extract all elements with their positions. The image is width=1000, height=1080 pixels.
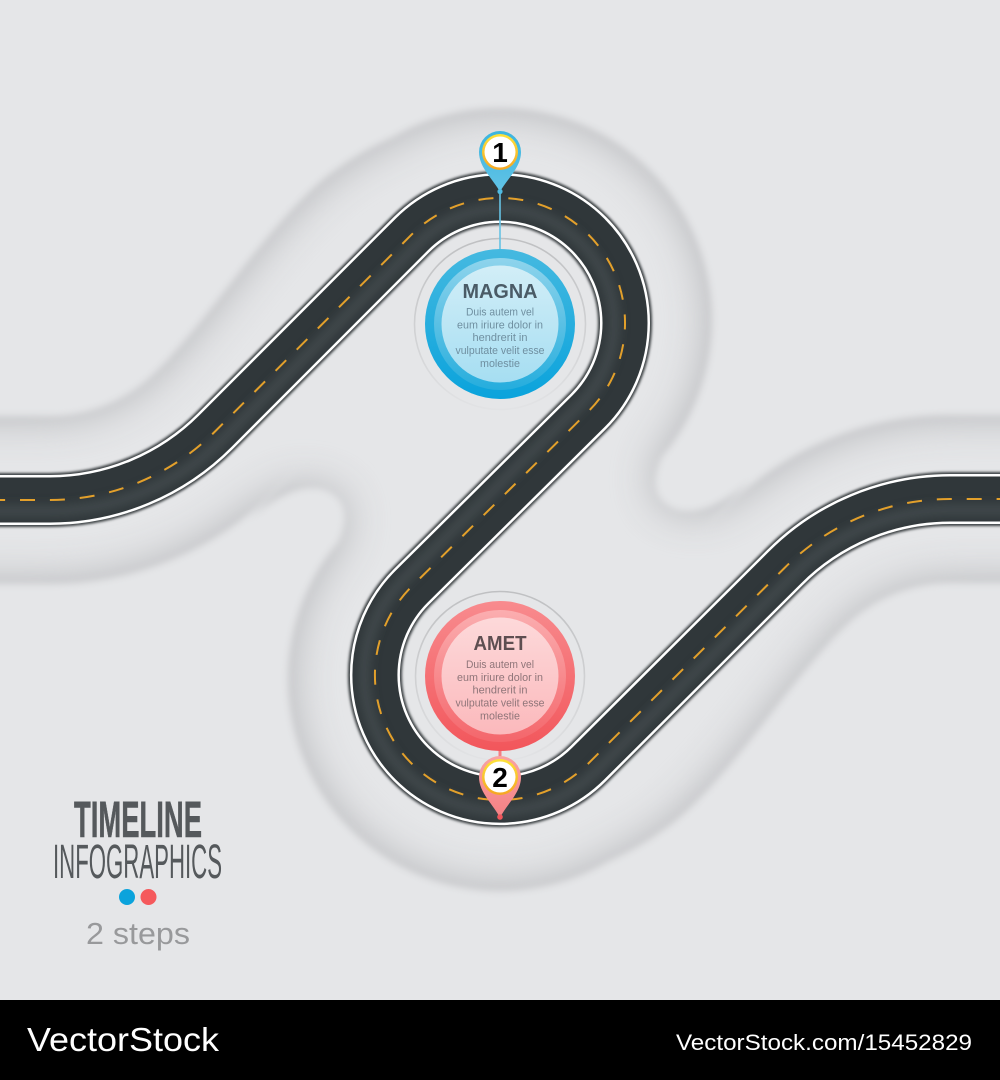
body text: vulputate velit esse xyxy=(456,698,544,710)
body text: molestie xyxy=(480,710,520,722)
panel: step 1 MAGNA xyxy=(414,190,586,410)
body text: vulputate velit esse xyxy=(456,345,544,357)
icon: map pin 1: 1 xyxy=(492,137,508,168)
step count: 2 steps xyxy=(86,916,190,951)
connector line xyxy=(498,748,502,760)
winding road xyxy=(0,198,1000,811)
footer bar xyxy=(0,1000,1000,1080)
icon: map pin 1 xyxy=(479,131,521,194)
legend dots xyxy=(119,889,156,905)
body text xyxy=(456,659,544,722)
road white edge lines xyxy=(0,198,1000,800)
body text: eum iriure dolor in xyxy=(457,320,543,332)
road asphalt surface xyxy=(0,198,1000,800)
footer logo text: VectorStock xyxy=(27,1021,220,1058)
footer url text: VectorStock.com/15452829 xyxy=(676,1030,972,1055)
body text: hendrerit in xyxy=(472,332,528,344)
title block xyxy=(53,791,222,951)
body text xyxy=(456,306,544,370)
body text: hendrerit in xyxy=(472,684,528,696)
body text: Duis autem vel xyxy=(466,659,534,671)
heading MAGNA: MAGNA xyxy=(462,281,538,303)
road surface highlight xyxy=(0,209,1000,811)
road ground shadow band xyxy=(0,108,1000,891)
body text: Duis autem vel xyxy=(466,306,534,318)
panel: step 2 AMET xyxy=(416,592,584,760)
circle badge xyxy=(425,601,575,751)
thin outer ring xyxy=(416,592,584,760)
body text: molestie xyxy=(480,358,520,370)
road centre dashes xyxy=(0,198,1000,800)
text: INFOGRAPHICS xyxy=(53,836,222,889)
icon: map pin 2: 2 xyxy=(492,762,508,793)
circle badge xyxy=(425,249,575,399)
icon: map pin 2 xyxy=(479,756,521,820)
thin outer ring xyxy=(414,238,586,410)
body text: eum iriure dolor in xyxy=(457,672,543,684)
connector line xyxy=(499,190,501,252)
heading AMET: AMET xyxy=(474,633,526,655)
heading TIMELINE: TIMELINE xyxy=(74,791,202,848)
